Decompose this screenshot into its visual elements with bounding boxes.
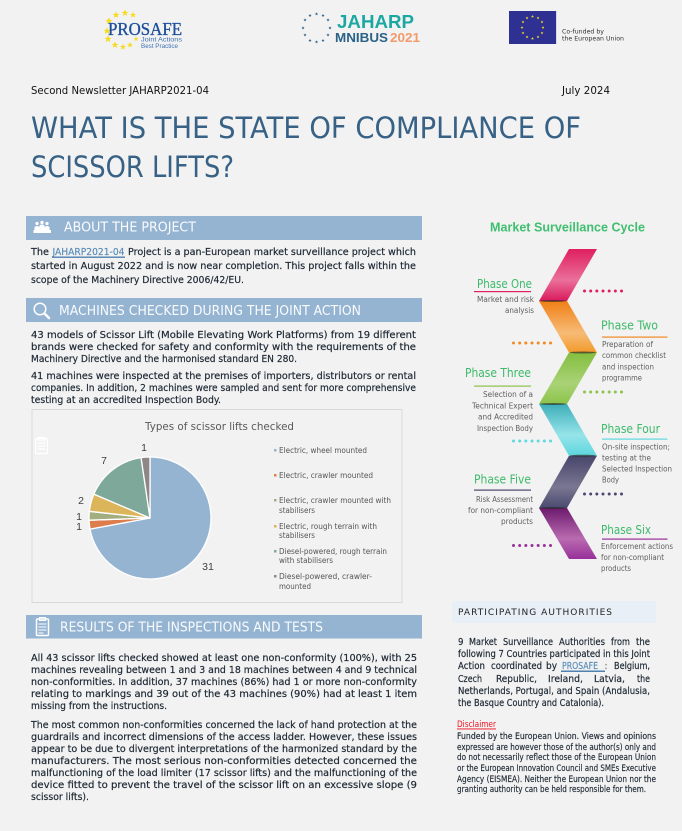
phase four: Phase Four bbox=[601, 422, 660, 436]
heading bar: about the project: ABOUT THE PROJECT bbox=[64, 220, 196, 236]
heading bar: machines checked: MACHINES CHECKED DURING THE JOINT ACTION bbox=[59, 304, 361, 319]
chevron ribbon bbox=[539, 249, 597, 559]
pie data labels: 31 bbox=[202, 561, 214, 573]
text: results body: guardrails and incorrect dimensions of the access ladder. However, these issues bbox=[31, 732, 417, 743]
logo: EU flag co-funded: the European Union bbox=[562, 36, 624, 42]
icon: people bbox=[34, 221, 51, 233]
icon: magnifier bbox=[34, 303, 49, 318]
panel: about the project bbox=[26, 216, 422, 286]
pie chart bbox=[89, 457, 211, 579]
pie data labels: 7 bbox=[101, 455, 107, 467]
phase three: Technical Expert bbox=[471, 402, 533, 410]
text: machines body: 43 models of Scissor Lift (Mobile Elevating Work Platforms) from 19 different bbox=[31, 330, 416, 341]
chart legend: mounted bbox=[279, 582, 311, 591]
newsletter reference: Second Newsletter JAHARP2021-04 bbox=[31, 85, 209, 97]
text: machines body bbox=[31, 330, 416, 406]
text: results body: scissor lifts). bbox=[31, 792, 89, 803]
text: machines body: companies. In addition, 2 machines were sampled and sent for more comprehensive bbox=[31, 383, 416, 394]
text: participating countries: : bbox=[605, 661, 607, 672]
logo: JAHARP Omnibus 2021: 2021 bbox=[390, 30, 420, 45]
disclaimer: granting authority can be held responsible for them. bbox=[457, 784, 646, 794]
heading bar: machines checked bbox=[26, 298, 422, 322]
text: participating countries: Authorities bbox=[559, 637, 605, 648]
panel: participating authorities bbox=[452, 601, 656, 794]
text: results body: manufacturers. The most serious non-conformities detected concerned the bbox=[31, 756, 417, 767]
cycle title: Market Surveillance Cycle bbox=[490, 220, 645, 234]
panel: market surveillance cycle bbox=[465, 220, 673, 573]
phase three bbox=[465, 366, 622, 433]
text: results body: missing from the instructions. bbox=[31, 701, 167, 712]
text: results body: non-conformities. In addition, 37 machines (86%) had 1 or more non-conformity bbox=[31, 677, 417, 688]
phase five: Risk Assessment bbox=[476, 495, 533, 504]
phase two bbox=[514, 318, 668, 382]
logo: PROSAFE bbox=[103, 9, 183, 50]
phase four: Selected Inspection bbox=[602, 464, 672, 474]
text: participating countries: Netherlands, Portugal, and Spain (Andalusia, bbox=[458, 686, 650, 697]
chart legend: stabilisers bbox=[279, 531, 315, 540]
heading bar: results bbox=[26, 615, 422, 638]
chart legend: stabilisers bbox=[279, 506, 315, 515]
text: participating countries: the bbox=[637, 674, 650, 685]
phase five: Phase Five bbox=[474, 472, 531, 486]
text: participating countries: Belgium, bbox=[614, 661, 650, 672]
chart legend: with stabilisers bbox=[279, 556, 333, 565]
phase six bbox=[514, 523, 673, 573]
heading: participating authorities bbox=[452, 601, 656, 623]
text: machines body: brands were checked for safety and conformity with the requirements of the bbox=[31, 342, 416, 353]
text: participating countries: the bbox=[636, 637, 650, 648]
phase two: Phase Two bbox=[601, 318, 658, 332]
text: participating countries: Surveillance bbox=[503, 637, 553, 648]
phase six: Enforcement actions bbox=[601, 542, 673, 551]
heading bar: results: RESULTS OF THE INSPECTIONS AND TESTS bbox=[60, 620, 323, 636]
disclaimer: do not necessarily reflect those of the European Union bbox=[457, 752, 656, 762]
text: machines body: Machinery Directive and the harmonised standard EN 280. bbox=[31, 354, 297, 365]
disclaimer: Funded by the European Union. Views and opinions bbox=[457, 731, 656, 741]
text: participating countries: Ireland, bbox=[548, 674, 583, 685]
text: participating countries: PROSAFE bbox=[562, 661, 598, 672]
chart legend: Electric, rough terrain with bbox=[279, 522, 377, 531]
phase four: On-site inspection; bbox=[602, 442, 670, 452]
chart title: Types of scissor lifts checked bbox=[144, 420, 294, 433]
chart legend: Electric, wheel mounted bbox=[279, 446, 367, 455]
icon: faded clipboard bbox=[36, 438, 48, 454]
disclaimer: expressed are however those of the author(s) only and bbox=[457, 742, 656, 752]
title: WHAT IS THE STATE OF COMPLIANCE OF bbox=[31, 111, 581, 145]
text: about body: JAHARP2021-04 bbox=[52, 247, 124, 258]
logo: JAHARP Omnibus 2021: MNIBUS bbox=[335, 30, 388, 45]
phase four: testing at the bbox=[602, 454, 651, 462]
title: SCISSOR LIFTS? bbox=[31, 150, 234, 184]
phase four: Body bbox=[602, 476, 619, 484]
text: results body: machines revealing between 1 and 3 and 18 machines between 4 and 9 technical bbox=[31, 665, 417, 676]
chart legend bbox=[274, 446, 391, 591]
pie data labels: 1 bbox=[76, 521, 82, 533]
pie data labels: 1 bbox=[76, 511, 82, 523]
text: participating countries: Market bbox=[469, 637, 497, 648]
panel: machines checked bbox=[26, 298, 422, 406]
logo: PROSAFE: Joint Actions bbox=[141, 36, 183, 44]
logo: EU flag co-funded: Co-funded by bbox=[562, 28, 604, 36]
chart legend: Diesel-powered, rough terrain bbox=[279, 547, 387, 556]
text: results body: malfunctioning of the load limiter (17 scissor lifts) and the malfunctioning of the bbox=[31, 768, 417, 779]
phase one bbox=[474, 277, 622, 315]
logo: PROSAFE: Best Practice bbox=[141, 43, 178, 50]
phase five bbox=[468, 472, 622, 526]
phase three: Selection of a bbox=[483, 390, 533, 399]
pie data labels bbox=[76, 442, 214, 573]
panel: pie chart of scissor lift types bbox=[32, 410, 402, 602]
disclaimer: Agency (EISMEA). Neither the European Union nor the bbox=[457, 774, 656, 784]
text: results body: All 43 scissor lifts checked showed at least one non-conformity (100%), with 25 bbox=[31, 653, 417, 664]
text: about body: scope of the Machinery Directive 2006/42/EU. bbox=[31, 275, 244, 286]
text: results body: appear to be due to divergent interpretations of the harmonized standard by the bbox=[31, 744, 417, 755]
text: participating countries: Latvia, bbox=[594, 674, 625, 685]
phase three: and Accredited bbox=[478, 412, 533, 422]
text: results body bbox=[30, 653, 417, 803]
title bbox=[31, 111, 581, 184]
text: participating countries: following 7 Countries participated in this Joint bbox=[458, 649, 650, 660]
text: participating countries: coordinated bbox=[491, 661, 542, 672]
text: about body: Project is a pan-European market surveillance project which bbox=[128, 247, 416, 258]
pie data labels: 1 bbox=[141, 442, 147, 454]
logo: JAHARP Omnibus 2021 bbox=[301, 12, 420, 45]
text: machines body: 41 machines were inspected at the premises of importers, distributors or rental bbox=[31, 371, 416, 382]
phase two: common checklist bbox=[602, 351, 666, 360]
phase two: and inspection bbox=[602, 362, 654, 372]
text: participating countries bbox=[458, 637, 650, 709]
text: participating countries: from bbox=[611, 637, 630, 648]
text: results body: relating to markings and 39 out of the 43 machines (90%) had at least 1 item bbox=[31, 689, 417, 700]
disclaimer: Disclaimer bbox=[457, 719, 496, 729]
text: participating countries: Czech bbox=[458, 674, 482, 685]
phase four bbox=[514, 422, 672, 484]
chart legend: Electric, crawler mounted bbox=[279, 471, 373, 480]
icon: clipboard bbox=[36, 618, 48, 636]
disclaimer bbox=[457, 719, 656, 794]
text: participating countries: 9 bbox=[458, 637, 464, 648]
text: results body: device fitted to prevent the travel of the scissor lift on an excessive slope (9 bbox=[31, 780, 417, 791]
phase six: Phase Six bbox=[601, 523, 651, 537]
chart legend: Diesel-powered, crawler- bbox=[279, 572, 372, 581]
phase three: Inspection Body bbox=[477, 424, 533, 433]
logo: JAHARP Omnibus 2021: JAHARP bbox=[337, 12, 414, 32]
phase six: products bbox=[601, 564, 631, 573]
phase three: Phase Three bbox=[465, 366, 531, 380]
text: machines body: testing at an accredited Inspection Body. bbox=[31, 395, 221, 406]
text: participating countries: by bbox=[546, 661, 557, 672]
logo: EU flag co-funded bbox=[509, 11, 624, 44]
text: participating countries: Republic, bbox=[496, 674, 537, 685]
phase five: for non-compliant bbox=[468, 506, 533, 515]
panel: results bbox=[26, 615, 422, 803]
text: about body bbox=[30, 247, 416, 286]
phase five: products bbox=[501, 517, 533, 526]
text: participating countries: Action bbox=[458, 661, 485, 672]
date: July 2024 bbox=[561, 85, 610, 97]
heading bar: about the project bbox=[26, 216, 422, 240]
phase one: analysis bbox=[505, 306, 534, 315]
logo: PROSAFE: PROSAFE bbox=[108, 19, 182, 39]
phase one: Market and risk bbox=[477, 295, 534, 304]
phase six: for non-compliant bbox=[601, 553, 664, 562]
phase two: programme bbox=[602, 374, 642, 382]
heading: participating authorities: PARTICIPATING AUTHORITIES bbox=[458, 608, 612, 618]
phase one: Phase One bbox=[477, 277, 532, 291]
chart legend: Electric, crawler mounted with bbox=[279, 496, 391, 505]
text: about body: started in August 2022 and is now near completion. This project falls within the bbox=[31, 261, 416, 272]
pie data labels: 2 bbox=[78, 495, 84, 507]
text: about body: The bbox=[30, 247, 49, 258]
phase two: Preparation of bbox=[602, 340, 653, 349]
text: participating countries: the Basque Country and Catalonia). bbox=[458, 698, 604, 709]
text: results body: The most common non-conformities concerned the lack of hand protection at the bbox=[30, 720, 417, 731]
